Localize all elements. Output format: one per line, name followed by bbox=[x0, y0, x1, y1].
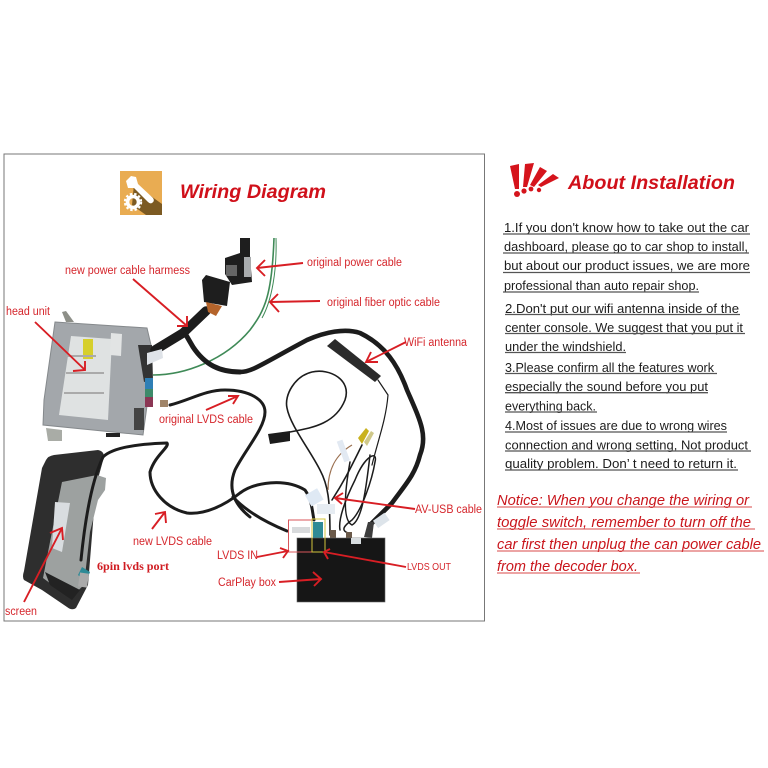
notice text bbox=[497, 493, 764, 575]
label: LVDS IN bbox=[217, 548, 288, 562]
notice text: car first then unplug the can power cable bbox=[497, 537, 761, 553]
label: original LVDS cable: original LVDS cable bbox=[159, 414, 253, 426]
LVDS IN highlight bbox=[288, 520, 312, 552]
original fiber optic cable bbox=[153, 238, 274, 375]
label: screen bbox=[5, 528, 63, 618]
label: head unit: head unit bbox=[6, 306, 51, 318]
screen bbox=[23, 450, 106, 609]
label: original power cable: original power cable bbox=[307, 257, 402, 269]
step 1: 1.If you don't know how to take out the car bbox=[504, 220, 750, 235]
label: LVDS OUT bbox=[324, 549, 451, 573]
label: new LVDS cable bbox=[133, 512, 212, 548]
LVDS OUT highlight bbox=[312, 519, 325, 552]
step 3: especially the sound before you put bbox=[505, 379, 708, 394]
step 1 bbox=[503, 220, 750, 293]
notice text: from the decoder box. bbox=[497, 559, 638, 575]
original power cable connector bbox=[225, 238, 252, 285]
step 4: connection and wrong setting, Not product bbox=[505, 438, 748, 452]
AV cable bundle bbox=[328, 428, 375, 533]
step 1: but about our product issues, we are more bbox=[504, 258, 750, 273]
step 3: everything back. bbox=[505, 398, 596, 414]
CarPlay box bbox=[297, 538, 385, 602]
label: original fiber optic cable bbox=[270, 294, 440, 312]
WiFi antenna bbox=[327, 339, 388, 465]
label: original LVDS cable bbox=[159, 396, 253, 426]
label: screen: screen bbox=[5, 606, 37, 618]
step 2: under the windshield. bbox=[505, 339, 626, 354]
heading: about installation: About Installation bbox=[567, 173, 735, 194]
label: original power cable bbox=[257, 257, 402, 276]
head unit bbox=[43, 311, 153, 441]
new power cable harness bbox=[147, 275, 240, 372]
text block: installation steps bbox=[503, 220, 751, 471]
label: new power cable harness bbox=[65, 265, 190, 326]
USB cable with plug bbox=[268, 371, 346, 535]
label: 6pin lvds port: 6pin lvds port bbox=[97, 559, 169, 573]
step 2 bbox=[505, 301, 745, 354]
panel: wiring diagram bbox=[4, 154, 484, 621]
step 3 bbox=[505, 360, 717, 414]
step 4: 4.Most of issues are due to wrong wires bbox=[505, 418, 727, 433]
label: original fiber optic cable: original fiber optic cable bbox=[327, 297, 440, 309]
label: WiFi antenna bbox=[366, 337, 468, 362]
step 4: quality problem. Don’ t need to return it. bbox=[505, 456, 737, 471]
step 2: center console. We suggest that you put it bbox=[505, 320, 743, 335]
icon: wrench and gear bbox=[120, 171, 162, 215]
cable labels and connectors bbox=[292, 488, 390, 539]
label: LVDS IN: LVDS IN bbox=[217, 550, 258, 562]
LVDS in cable bbox=[233, 497, 287, 531]
label: head unit bbox=[6, 306, 85, 371]
step 4 bbox=[505, 418, 751, 471]
step 2: 2.Don't put our wifi antenna inside of the bbox=[505, 301, 739, 316]
label: CarPlay box: CarPlay box bbox=[218, 577, 276, 589]
new LVDS cable bbox=[81, 443, 314, 560]
heading: wiring diagram: Wiring Diagram bbox=[180, 182, 326, 203]
step 3: 3.Please confirm all the features work bbox=[505, 360, 714, 375]
step 1: professional than auto repair shop. bbox=[504, 278, 699, 293]
label: AV-USB cable: AV-USB cable bbox=[415, 504, 482, 516]
step 1: dashboard, please go to car shop to install, bbox=[504, 239, 748, 254]
label: LVDS OUT: LVDS OUT bbox=[407, 562, 451, 573]
label: WiFi antenna: WiFi antenna bbox=[404, 337, 468, 349]
label: CarPlay box bbox=[218, 572, 321, 589]
label: AV-USB cable bbox=[335, 493, 482, 516]
original LVDS cable bbox=[160, 390, 265, 517]
notice text: toggle switch, remember to turn off the bbox=[497, 515, 751, 531]
label: new power cable harness: new power cable harmess bbox=[65, 265, 190, 277]
icon: exclamation marks bbox=[510, 163, 559, 197]
notice text: Notice: When you change the wiring or bbox=[497, 493, 750, 509]
label: new LVDS cable: new LVDS cable bbox=[133, 536, 212, 548]
WiFi antenna cable bbox=[240, 331, 423, 525]
